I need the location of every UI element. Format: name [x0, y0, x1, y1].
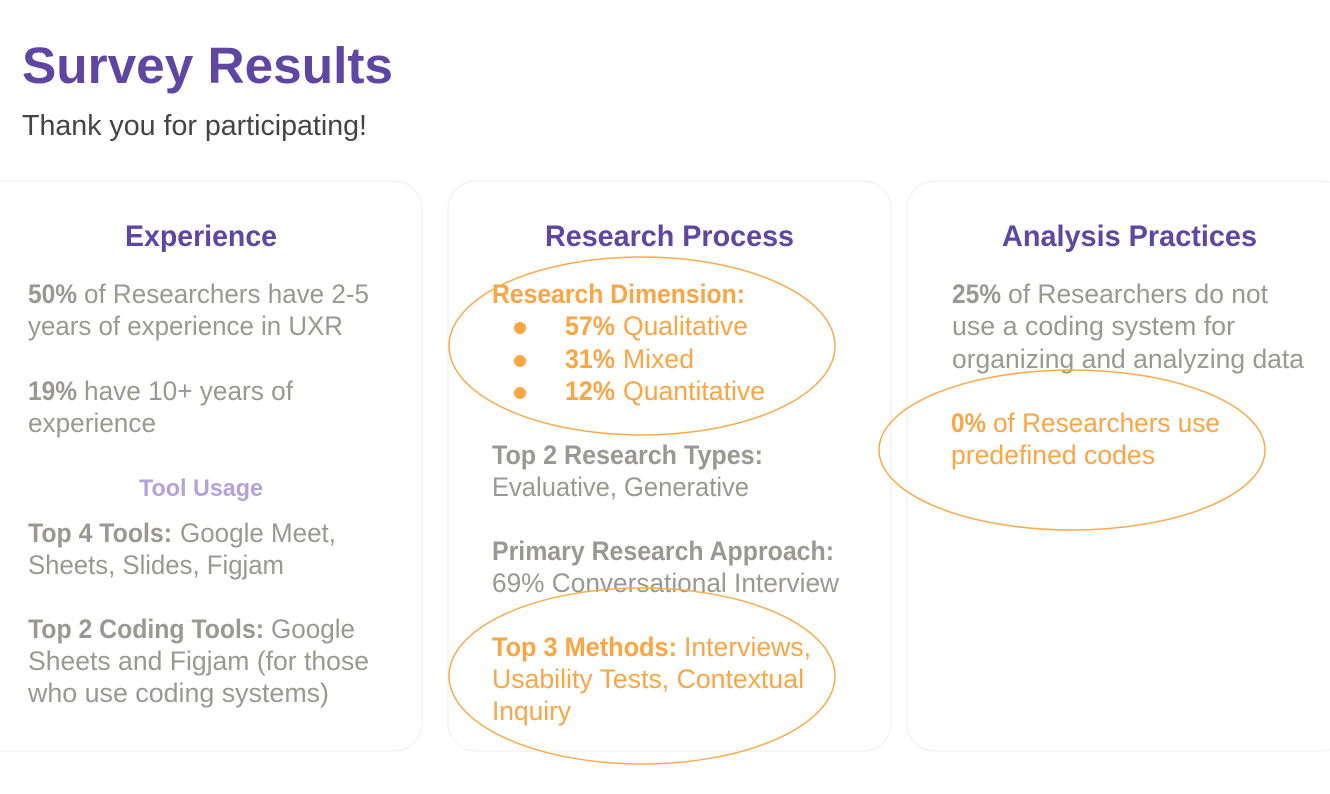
text: research dimension: 12% [565, 376, 615, 406]
callout oval: top 3 methods [449, 588, 835, 764]
panel: experience [0, 181, 422, 751]
title: Survey Results [22, 37, 393, 94]
text: top 3 methods: Interviews, [684, 632, 811, 662]
text: research dimension: Qualitative [623, 311, 748, 341]
text: primary research approach: Primary Research Approach: [492, 536, 834, 566]
text: research dimension [492, 279, 765, 406]
text: predefined codes: predefined codes [951, 440, 1155, 470]
text: top 4 tools: Sheets, Slides, Figjam [28, 550, 284, 580]
text: top 2 coding tools: who use coding systems) [27, 678, 329, 708]
text: no coding system [952, 279, 1305, 374]
text: top 4 tools: Top 4 Tools: [28, 518, 172, 548]
text: top 3 methods [492, 632, 811, 726]
text: top 2 coding tools: Top 2 Coding Tools: [28, 614, 264, 644]
text: no coding system: use a coding system for [952, 311, 1235, 341]
text: top 3 methods: Usability Tests, Contextual [492, 664, 804, 694]
panel: analysis practices [879, 181, 1330, 751]
text: top 2 research types: Top 2 Research Types: [492, 440, 763, 470]
text: primary research approach [492, 536, 839, 598]
text: research dimension: Mixed [623, 344, 694, 374]
text: predefined codes [951, 408, 1220, 470]
text: research dimension: 57% [565, 311, 615, 341]
panel: research process [448, 181, 891, 764]
text: experience share 10+ years [28, 376, 293, 438]
text: experience share 2-5 years: years of experience in UXR [28, 311, 343, 341]
text: top 2 research types [492, 440, 763, 502]
text: top 3 methods: Inquiry [492, 696, 571, 726]
heading: experience: Experience [125, 220, 277, 253]
text: top 4 tools [28, 518, 336, 580]
text: research dimension: Quantitative [623, 376, 765, 406]
heading: analysis practices: Analysis Practices [1002, 220, 1257, 253]
text: top 2 research types: Evaluative, Generative [492, 472, 749, 502]
text: top 4 tools: Google Meet, [180, 518, 336, 548]
text: research dimension: Research Dimension: [492, 279, 745, 309]
text: top 2 coding tools [27, 614, 369, 708]
text: top 2 coding tools: Sheets and Figjam (for those [28, 646, 369, 676]
text: experience share 10+ years: experience [28, 408, 156, 438]
text: experience share 2-5 years: of Researchers have 2-5 [84, 279, 369, 309]
subheading: tool usage: Tool Usage [139, 475, 263, 502]
text: no coding system: organizing and analyzing data [952, 344, 1305, 374]
text: no coding system: of Researchers do not [1008, 279, 1268, 309]
text: top 3 methods: Top 3 Methods: [492, 632, 677, 662]
text: experience share 2-5 years: 50% [28, 279, 77, 309]
subtitle: Thank you for participating! [22, 110, 367, 142]
text: no coding system: 25% [952, 279, 1001, 309]
text: research dimension: 31% [565, 344, 615, 374]
text: primary research approach: 69% Conversational Interview [492, 568, 839, 598]
text: experience share 2-5 years [28, 279, 369, 341]
text: predefined codes: of Researchers use [993, 408, 1220, 438]
text: predefined codes: 0% [951, 408, 986, 438]
callout oval: research dimension [449, 257, 835, 435]
text: top 2 coding tools: Google [271, 614, 355, 644]
callout oval: predefined codes [879, 370, 1265, 530]
text: experience share 10+ years: 19% [28, 376, 77, 406]
text: experience share 10+ years: have 10+ years of [84, 376, 293, 406]
heading: research process: Research Process [545, 220, 794, 253]
